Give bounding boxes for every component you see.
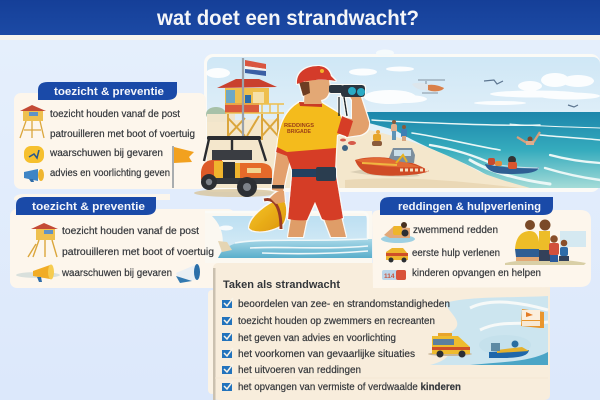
icon: megaphone xyxy=(24,169,44,182)
heading tab xyxy=(380,197,553,215)
rescue boat xyxy=(350,148,429,177)
item 4: het voorkomen van gevaarlijke situaties xyxy=(238,349,415,360)
icon: 114 badge xyxy=(382,270,406,280)
belt xyxy=(292,169,336,177)
dunes xyxy=(206,107,226,121)
icon: rescue car xyxy=(386,248,408,262)
binoculars xyxy=(329,85,365,116)
heading tab: toezicht & preventie xyxy=(54,86,164,98)
item 6: het opvangen van vermiste of verdwaalde kinderen xyxy=(238,382,461,393)
icon: orange flag xyxy=(173,146,194,188)
legs xyxy=(288,216,346,237)
text: waarschuwen: waarschuwen bij gevaren xyxy=(61,268,172,279)
icon: 114 badge: 114 xyxy=(384,273,395,280)
title: wat doet een strandwacht? xyxy=(156,7,419,30)
panel: taken als strandwacht xyxy=(208,263,550,400)
panel: reddingen & hulpverlening xyxy=(372,197,591,288)
lifeguard tower xyxy=(217,79,284,140)
waves xyxy=(372,120,600,184)
sea xyxy=(365,112,600,188)
heading tab xyxy=(38,82,177,100)
item 3: het geven van advies en voorlichting xyxy=(238,333,396,344)
text: patrouilleren: patrouilleren met boot of voertuig xyxy=(62,247,214,258)
shirt xyxy=(277,102,345,170)
heading tab: reddingen & hulpverlening xyxy=(398,201,541,213)
heading tab xyxy=(16,197,156,215)
people on beach xyxy=(372,120,407,146)
title banner xyxy=(0,0,600,40)
beach toys xyxy=(340,138,356,145)
title: Taken als strandwacht xyxy=(223,279,340,291)
rescue vehicle xyxy=(194,136,278,197)
beach scene illustration xyxy=(204,50,600,192)
head xyxy=(304,80,330,104)
item 5: het uitvoeren van reddingen xyxy=(238,365,361,376)
icon: lifeguard post xyxy=(20,105,46,138)
clouds xyxy=(206,66,600,105)
rescue can xyxy=(249,191,286,231)
back print: BRIGADE xyxy=(287,129,311,135)
icon: yellow megaphone xyxy=(16,264,60,282)
tower and vehicle illustration xyxy=(194,58,284,197)
icon: jet boat xyxy=(479,335,531,358)
panel: toezicht & preventie 2 xyxy=(10,194,372,288)
sea strip behind panel xyxy=(205,211,372,263)
sand xyxy=(207,119,530,188)
text: patrouilleren: patrouilleren met boot of voertuig xyxy=(50,129,195,140)
icon: white megaphone xyxy=(176,264,200,283)
item 1: beoordelen van zee- en strandomstandigheden xyxy=(238,299,450,310)
icon: rescue van xyxy=(428,333,472,358)
left arm xyxy=(272,150,291,192)
helicopter xyxy=(412,80,445,93)
raised arm xyxy=(346,88,369,137)
heading tab: toezicht & preventie xyxy=(32,201,145,213)
icon: swimmer rescue xyxy=(381,222,415,243)
icon: warning badge xyxy=(24,146,44,163)
text: zwemmend redden: zwemmend redden xyxy=(413,225,498,236)
sea illustration xyxy=(430,296,548,365)
panel: toezicht & preventie 1 xyxy=(14,82,206,189)
text: advies: advies en voorlichting geven xyxy=(50,168,170,179)
swimmer xyxy=(517,132,540,145)
gulls xyxy=(484,80,578,107)
text: toezicht houden: toezicht houden vanaf de post xyxy=(62,226,199,237)
text: kinderen opvangen: kinderen opvangen en helpen xyxy=(412,268,541,279)
family illustration xyxy=(505,220,586,265)
lifeguard figure xyxy=(249,66,369,237)
text: toezicht houden: toezicht houden vanaf de post xyxy=(50,109,180,120)
icon: orange sign xyxy=(521,309,544,328)
text: eerste hulp: eerste hulp verlenen xyxy=(412,248,500,259)
text: waarschuwen: waarschuwen bij gevaren xyxy=(49,148,163,159)
shorts xyxy=(288,176,343,220)
inflatable boat xyxy=(485,156,539,174)
item 2: toezicht houden op zwemmers en recreanten xyxy=(238,316,435,327)
back print: REDDINGS xyxy=(284,123,314,129)
flag xyxy=(243,58,266,140)
checklist xyxy=(222,298,461,393)
icon: lifeguard post xyxy=(28,223,58,257)
back print xyxy=(284,123,314,135)
